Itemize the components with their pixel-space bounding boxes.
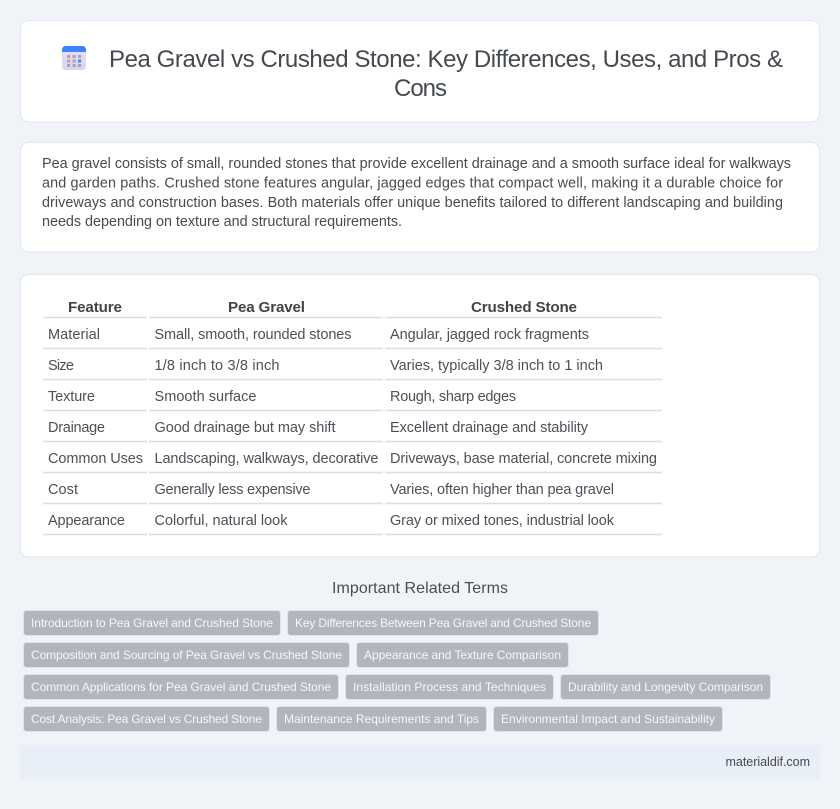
row: appearance bbox=[48, 513, 615, 529]
row: cost bbox=[48, 482, 614, 498]
row: texture: Texture bbox=[48, 389, 95, 405]
tag bbox=[494, 706, 722, 732]
row: drainage: Good drainage but may shift bbox=[154, 420, 336, 436]
tag bbox=[276, 706, 486, 732]
row: cost: Varies, often higher than pea gravel bbox=[390, 482, 614, 498]
row: appearance: Gray or mixed tones, industrial look bbox=[390, 513, 615, 529]
tag: Installation Process and Techniques bbox=[353, 680, 546, 694]
row: size: 1/8 inch to 3/8 inch bbox=[154, 358, 280, 374]
tag: Key Differences Between Pea Gravel and Crushed Stone bbox=[295, 616, 591, 630]
tag bbox=[356, 642, 568, 668]
heading: related terms: Important Related Terms bbox=[332, 580, 508, 597]
tag bbox=[288, 610, 598, 636]
row: material: Small, smooth, rounded stones bbox=[154, 327, 352, 343]
row: drainage: Excellent drainage and stability bbox=[390, 420, 589, 436]
tag bbox=[346, 674, 554, 700]
row: material bbox=[48, 327, 589, 343]
table header bbox=[68, 299, 577, 316]
tag: Maintenance Requirements and Tips bbox=[284, 712, 479, 726]
row: appearance: Appearance bbox=[48, 513, 125, 529]
row: common uses: Landscaping, walkways, decorative bbox=[154, 451, 378, 467]
icon: calendar bbox=[62, 46, 86, 70]
row: drainage bbox=[48, 420, 589, 436]
table header: Feature bbox=[68, 299, 122, 316]
tag bbox=[24, 610, 280, 636]
tag: Durability and Longevity Comparison bbox=[568, 680, 763, 694]
title: Cons bbox=[394, 75, 447, 102]
tag: Environmental Impact and Sustainability bbox=[501, 712, 715, 726]
row: material: Material bbox=[48, 327, 100, 343]
related term tags bbox=[24, 610, 770, 732]
panel: summary text: needs depending on texture and structural requirements. bbox=[42, 214, 402, 230]
tag: Appearance and Texture Comparison bbox=[364, 648, 561, 662]
panel: summary text: driveways and construction bases. Both materials offer unique benefits tailored to different landscaping and building bbox=[42, 195, 783, 211]
row: common uses bbox=[48, 451, 657, 467]
row: texture: Smooth surface bbox=[154, 389, 256, 405]
row: size: Size bbox=[48, 358, 74, 374]
row: material: Angular, jagged rock fragments bbox=[390, 327, 589, 343]
panel: summary text: and garden paths. Crushed stone features angular, jagged edges that compact well, making it a durable choice for bbox=[42, 176, 783, 192]
tag bbox=[24, 706, 270, 732]
tag: Composition and Sourcing of Pea Gravel vs Crushed Stone bbox=[31, 648, 342, 662]
row: cost: Generally less expensive bbox=[154, 482, 310, 498]
row: size bbox=[48, 358, 603, 374]
panel: comparison table bbox=[20, 274, 820, 557]
footer bbox=[20, 745, 820, 779]
row: size: Varies, typically 3/8 inch to 1 inch bbox=[390, 358, 603, 374]
table header: Pea Gravel bbox=[228, 299, 305, 316]
tag bbox=[560, 674, 770, 700]
row: drainage: Drainage bbox=[48, 420, 105, 436]
title: Pea Gravel vs Crushed Stone: Key Differences, Uses, and Pros & bbox=[109, 46, 783, 73]
panel: summary text: Pea gravel consists of small, rounded stones that provide excellent drainage and a smooth surface ideal for walkways bbox=[42, 156, 791, 172]
table header: Crushed Stone bbox=[471, 299, 577, 316]
row: common uses: Driveways, base material, concrete mixing bbox=[390, 451, 657, 467]
title bbox=[109, 46, 783, 102]
panel: header bbox=[20, 20, 820, 122]
panel: summary text bbox=[20, 142, 820, 252]
row: common uses: Common Uses bbox=[48, 451, 143, 467]
tag bbox=[24, 642, 350, 668]
row: texture bbox=[48, 389, 516, 405]
footer: materialdif.com bbox=[726, 755, 810, 769]
tag bbox=[24, 674, 338, 700]
tag: Common Applications for Pea Gravel and Crushed Stone bbox=[31, 680, 331, 694]
row: cost: Cost bbox=[48, 482, 78, 498]
row: texture: Rough, sharp edges bbox=[390, 389, 516, 405]
row: appearance: Colorful, natural look bbox=[154, 513, 288, 529]
tag: Cost Analysis: Pea Gravel vs Crushed Stone bbox=[31, 712, 262, 726]
tag: Introduction to Pea Gravel and Crushed Stone bbox=[31, 616, 273, 630]
